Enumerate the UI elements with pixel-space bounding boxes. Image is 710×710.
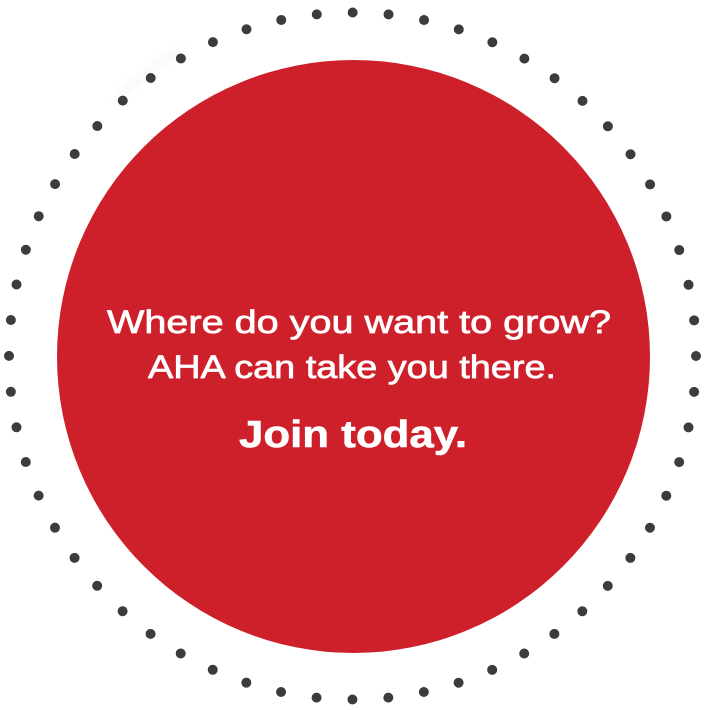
faint shadow arc <box>116 50 184 100</box>
message text <box>107 304 611 456</box>
line: AHA can take you there: AHA can take you there. <box>148 349 556 385</box>
line: where do you want to grow: Where do you want to grow? <box>107 304 611 340</box>
red circle <box>57 60 650 653</box>
call to action: join today: Join today. <box>239 414 467 456</box>
